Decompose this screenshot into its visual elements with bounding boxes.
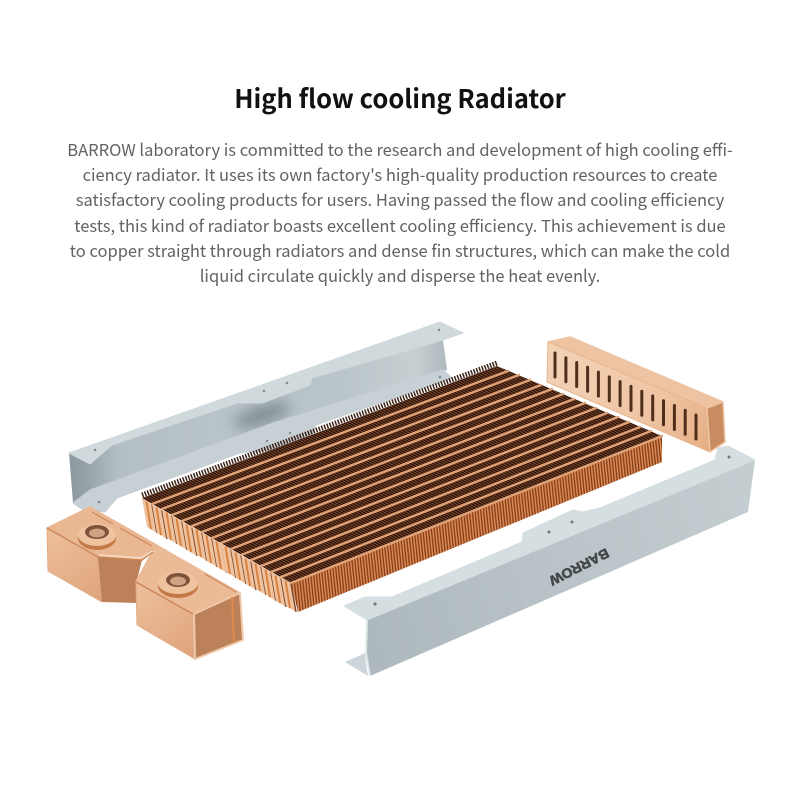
body text: BARROW laboratory is committed to the research and development of high cooling effi- [67,137,733,161]
front bracket [344,446,755,676]
mounting holes [94,329,441,503]
channel shadow [231,397,293,433]
body text: liquid circulate quickly and disperse the heat evenly. [200,263,600,287]
first block top face [47,507,160,561]
end face strip [232,597,234,643]
back bracket lower flange [73,370,452,512]
back bracket wall [69,340,447,503]
first block cut face [98,557,142,603]
body text: satisfactory cooling products for users. Having passed the flow and cooling efficiency [76,187,724,211]
bracket front edge [366,620,370,676]
front bracket lower flange [345,653,368,676]
top band groove [92,512,236,592]
bright bevel on notch [99,551,152,558]
back bracket top flange [69,322,463,464]
front bracket top flange [344,446,755,620]
body text: to copper straight through radiators and dense fin structures, which can make the cold [70,238,730,262]
body text: ciency radiator. It uses its own factory's high-quality production resources to create [83,162,717,186]
body text [67,137,733,287]
core side face with fins [291,436,662,612]
fin teeth along rear edge [142,363,497,495]
BARROW logo: BARROW [546,545,611,588]
tank front face [547,342,710,452]
port fitting one [78,524,116,550]
copper tubes [152,371,662,583]
front bracket face [366,460,755,676]
right end tank [547,337,725,452]
tank end face [707,402,725,452]
tank top edge [548,337,723,408]
radiator core [142,363,662,612]
core top face with fins [142,366,662,583]
body text: tests, this kind of radiator boasts excellent cooling efficiency. This achievement is due [74,213,726,237]
highlight edges [47,528,193,614]
bracket holes [373,456,730,606]
back bracket [69,322,463,512]
tube ends on left face [142,498,296,612]
first block side face [47,528,102,602]
illustration artwork [47,322,755,676]
second block side face [136,582,195,659]
second block top face [136,547,240,614]
port fitting two [158,572,198,598]
inlet outlet manifold [47,507,243,659]
second block end face [194,593,243,659]
title: High flow cooling Radiator [234,79,566,116]
tank slots [555,353,696,439]
